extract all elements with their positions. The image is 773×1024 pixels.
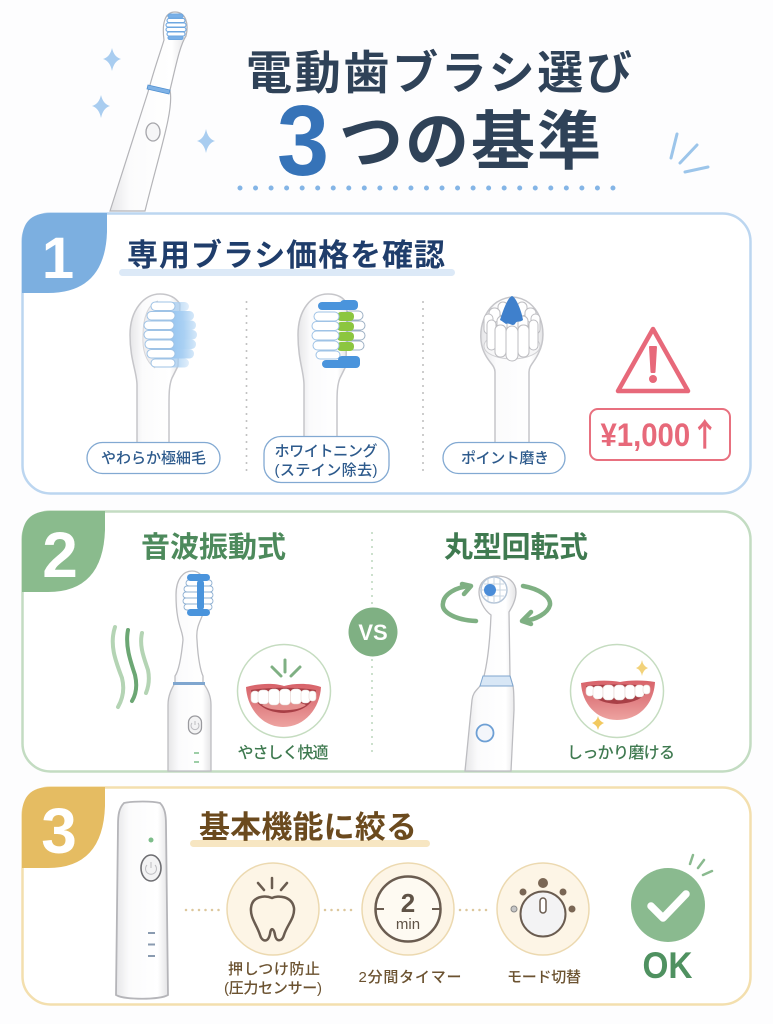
- vibration waves: [113, 627, 149, 707]
- badge 3: [22, 787, 105, 868]
- badge 2: [22, 511, 105, 592]
- heading 3: 基本機能に絞る: [199, 810, 417, 845]
- sparkles: [92, 48, 215, 153]
- OK check badge: OK: [642, 945, 693, 986]
- badge 1: 1: [42, 226, 74, 291]
- title line 1: 電動歯ブラシ選び: [246, 47, 632, 99]
- title line 2: つの基準: [339, 106, 601, 178]
- polished label: しっかり磨ける: [567, 744, 675, 762]
- polished smile icon: [570, 644, 664, 738]
- whitening brush head: [298, 294, 365, 438]
- icon: 2 minute timer: 2: [401, 888, 415, 918]
- dotted title rule: [240, 186, 613, 190]
- badge 2: 2: [42, 519, 78, 591]
- label: soft bristle: [87, 442, 220, 474]
- accent lines: [671, 134, 708, 172]
- label: mode switch: モード切替: [507, 968, 581, 986]
- heading: rotary: 丸型回転式: [444, 531, 588, 564]
- panel 1: brush price: [22, 213, 750, 494]
- title numeral 3: 3: [277, 85, 329, 197]
- panel 2: sonic vs rotary: [22, 511, 750, 772]
- label: timer: 2分間タイマー: [358, 969, 462, 986]
- sonic toothbrush: [168, 571, 213, 771]
- price callout: ¥1,000↑: [600, 410, 720, 456]
- point brush head: [481, 296, 543, 445]
- VS badge: [348, 608, 398, 656]
- rotary toothbrush: [465, 576, 516, 771]
- gentle smile icon: [238, 644, 330, 738]
- icon: 2 minute timer: [362, 863, 454, 955]
- badge 1: [22, 213, 107, 293]
- label: point: [443, 442, 565, 474]
- label: pressure sensor: (圧力センサー): [224, 980, 322, 997]
- OK check badge: [631, 855, 712, 986]
- header toothbrush illustration: [110, 12, 187, 211]
- toothbrush body: [116, 802, 168, 999]
- icon: mode dial: [497, 863, 589, 955]
- badge 3: 3: [41, 795, 77, 867]
- label: point: ポイント磨き: [461, 450, 549, 467]
- VS badge: VS: [358, 620, 388, 645]
- icon: pressure sensor tooth: [227, 863, 319, 955]
- label: pressure sensor: 押しつけ防止: [228, 961, 320, 978]
- heading 1: 専用ブラシ価格を確認: [127, 238, 445, 273]
- icon: warning triangle: [618, 329, 688, 391]
- gentle label: やさしく快適: [238, 744, 328, 762]
- panel 3: basic functions: [22, 787, 750, 1004]
- label: whitening: ホワイトニング: [274, 443, 378, 460]
- icon: 2 minute timer: min: [396, 916, 420, 933]
- heading: sonic: 音波振動式: [141, 531, 286, 564]
- label: whitening: [264, 436, 389, 482]
- label: pressure sensor: [224, 961, 322, 997]
- label: whitening: (ステイン除去): [274, 462, 378, 479]
- label: soft bristle: やわらか極細毛: [101, 450, 206, 467]
- rotation arrows: [443, 584, 550, 624]
- soft bristle brush head: [130, 294, 197, 445]
